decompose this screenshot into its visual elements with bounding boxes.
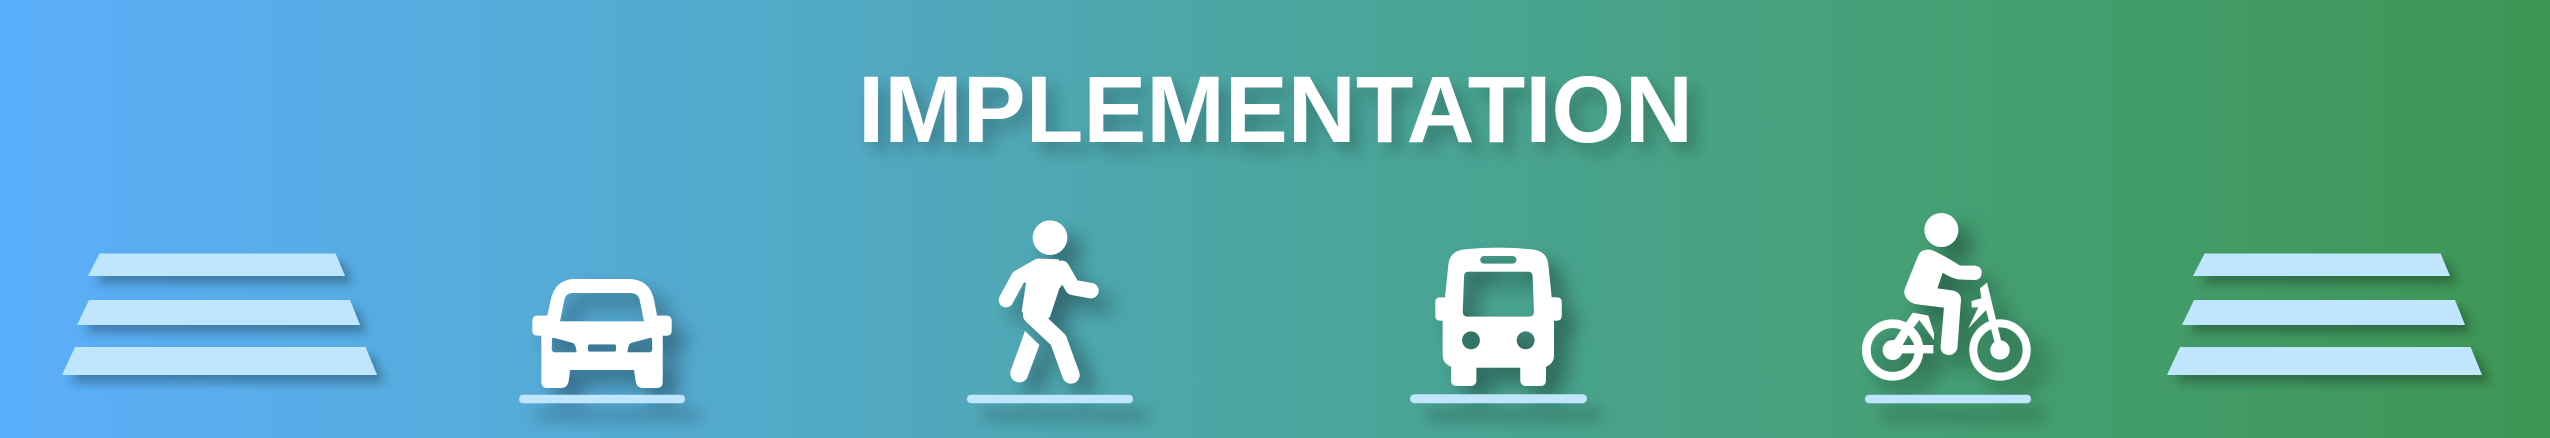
bus ground bar	[1410, 394, 1587, 403]
cyclist ground bar	[1865, 395, 2031, 403]
pedestrian ground bar	[967, 395, 1133, 403]
icon: cyclist	[1866, 213, 2027, 377]
icon: bus	[1435, 248, 1562, 386]
icon: right crosswalk stripes	[2167, 254, 2482, 375]
car ground bar	[519, 395, 685, 403]
icon: left crosswalk stripes	[62, 254, 377, 375]
title: IMPLEMENTATION	[858, 57, 1693, 163]
icon: car	[532, 279, 672, 388]
icon: pedestrian	[1006, 220, 1091, 382]
